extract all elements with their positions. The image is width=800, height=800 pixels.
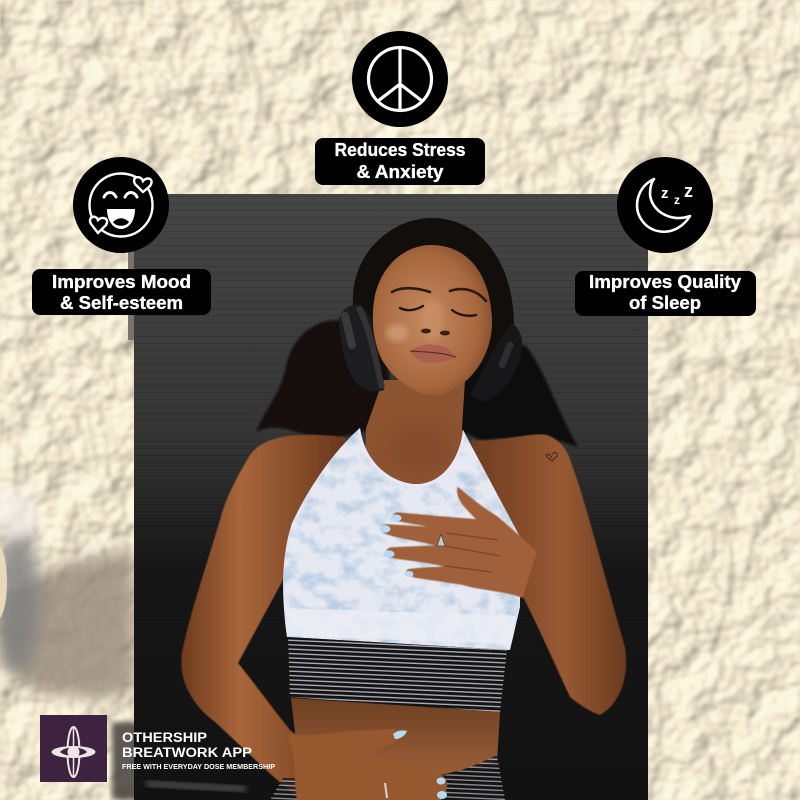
label: reduces stress: Reduces Stress — [334, 140, 466, 160]
tattoo — [546, 452, 557, 461]
label: improves sleep — [575, 271, 756, 316]
icon: crescent moon with zzz: z — [661, 185, 668, 202]
face — [373, 245, 492, 395]
woman lying on the mat — [181, 218, 626, 800]
text: app promotion: BREATWORK APP — [122, 745, 252, 760]
hair spread — [256, 218, 578, 447]
midriff — [291, 698, 500, 780]
nose — [421, 329, 431, 333]
logo: othership badge — [40, 715, 107, 782]
label: improves sleep: Improves Quality — [589, 272, 741, 292]
label: improves sleep: of Sleep — [629, 293, 701, 313]
lips — [410, 344, 456, 363]
hand on chest — [380, 488, 536, 597]
label: improves mood: Improves Mood — [52, 272, 191, 292]
icon: peace sign — [352, 31, 448, 127]
text: app promotion: FREE WITH EVERYDAY DOSE MEMBERSHIP — [122, 762, 275, 771]
hand on belly — [289, 730, 447, 800]
label: improves mood — [32, 269, 211, 315]
eyebrows — [392, 288, 486, 301]
headphones — [339, 305, 522, 402]
text: app promotion — [122, 730, 275, 771]
label: reduces stress — [315, 138, 485, 185]
left arm — [181, 435, 350, 800]
closed eyes — [400, 306, 476, 316]
icon: smiling face with hearts — [73, 157, 169, 253]
icon: crescent moon with zzz — [617, 157, 713, 253]
striped waistband — [288, 637, 507, 712]
label: reduces stress: & Anxiety — [356, 162, 444, 182]
text: app promotion: OTHERSHIP — [122, 730, 207, 745]
halter top — [283, 428, 520, 650]
icon: crescent moon with zzz: z — [684, 181, 693, 201]
neck and chest — [365, 380, 470, 491]
striped leggings — [270, 755, 505, 800]
icon: crescent moon with zzz: z — [674, 193, 680, 207]
label: improves mood: & Self-esteem — [60, 293, 183, 313]
right arm — [470, 434, 626, 715]
yoga mat — [128, 194, 648, 800]
